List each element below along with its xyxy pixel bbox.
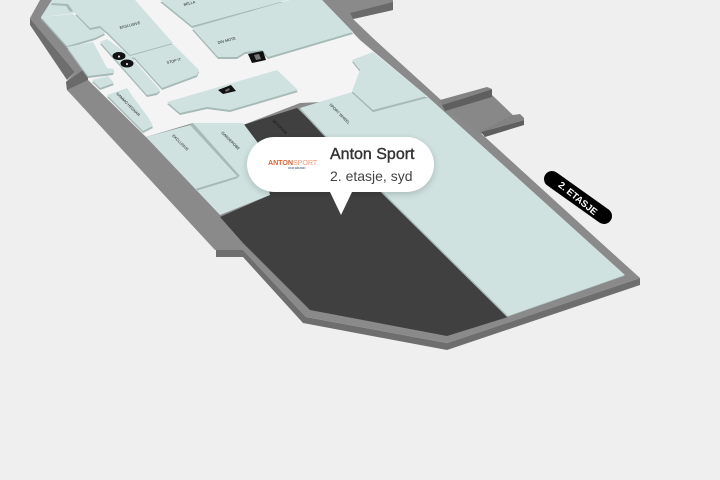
building outer wall [30, 0, 640, 350]
label: north: BELLA [183, 0, 196, 7]
icon: lift [248, 51, 266, 63]
store logo: ANTONSPORT [268, 158, 317, 167]
icon: round badge two [120, 60, 134, 68]
label: garderobe: GARDEROBE [220, 131, 241, 151]
central store [167, 70, 298, 113]
store: west lower units [146, 123, 270, 215]
store logo: OUR BRAND [288, 166, 305, 170]
store: large east unit [300, 92, 625, 316]
walkway floor [41, 0, 428, 137]
store: upper east unit [352, 52, 427, 110]
dark highlighted store [220, 108, 508, 336]
north stores [160, 0, 353, 57]
store name: Anton Sport [330, 146, 414, 163]
label: sport unit: SPORT WHEEL [328, 103, 351, 125]
label: north 2: DIN MOTE [217, 36, 237, 45]
icon: round badge one: ● [117, 54, 121, 60]
label: exclusive: EXCLUSIVE [171, 134, 190, 152]
icon: stairs [218, 85, 236, 94]
northwest stores [41, 0, 199, 131]
floor label pill: 2. ETASJE [556, 180, 599, 218]
label: stop: STOP IT [166, 57, 182, 65]
callout pointer [330, 192, 352, 215]
label: long: NAMMO HEGNAR [115, 92, 141, 117]
callout bubble [247, 137, 434, 192]
annex loading bay [438, 87, 524, 137]
label: top: EKSLUSIVE [119, 21, 141, 30]
icon: round badge one [112, 52, 126, 60]
store location: 2. etasje, syd [330, 168, 412, 184]
label: dark store: SKYDIVER [271, 119, 288, 135]
icon: round badge two: ● [125, 62, 129, 68]
